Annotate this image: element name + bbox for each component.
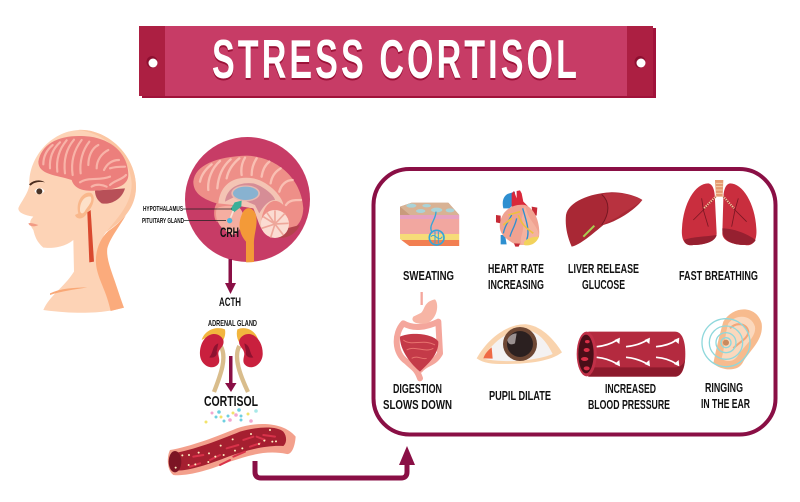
label: fast breathing: FAST BREATHING [679,268,758,283]
label: CRH: CRH [220,224,239,240]
label: adrenal gland: ADRENAL GLAND [208,318,257,328]
label: digestion slows down: DIGESTION [393,381,442,396]
label: ringing in the ear: IN THE EAR [701,396,750,411]
icon: eye [477,324,562,364]
head with brain illustration [18,130,136,313]
icon: digestive system [397,292,440,378]
icon: blood vessel pressure [577,332,685,377]
icon: ringing ear [702,309,762,369]
label: cortisol: CORTISOL [204,393,258,410]
label: increased blood pressure: BLOOD PRESSURE [588,397,670,412]
icon: lungs [682,180,756,245]
label: increased blood pressure [588,381,670,412]
label: liver release glucose [568,261,639,292]
label: heart rate increasing: INCREASING [488,277,544,292]
arrow: brain to ACTH [225,259,236,294]
label: ACTH: ACTH [219,295,241,309]
icon: heart [496,190,539,247]
icon: sweating skin [400,202,460,246]
arrow: vessel to symptoms panel [255,457,407,478]
label: pupil dilate: PUPIL DILATE [489,388,551,403]
label: ringing in the ear [701,380,750,411]
panel: symptoms [374,169,776,434]
label: digestion slows down: SLOWS DOWN [383,397,452,412]
label: liver release glucose: GLUCOSE [582,277,625,292]
kidneys [200,328,263,392]
label: ringing in the ear: RINGING [705,380,743,395]
label: digestion slows down [383,381,452,412]
label: hypothalamus: HYPOTHALAMUS [143,206,183,213]
cortisol molecules [204,408,258,424]
brain cross-section circle [142,137,310,263]
icon: liver [566,192,642,247]
label: liver release glucose: LIVER RELEASE [568,261,639,276]
label leader lines [183,209,232,220]
title banner [139,26,656,98]
label: pituitary gland: PITUITARY GLAND [142,218,184,225]
label: sweating: SWEATING [403,268,454,283]
blood vessel [168,424,296,475]
arrow: adrenal to cortisol [225,356,236,392]
label: heart rate increasing: HEART RATE [488,261,544,276]
label: heart rate increasing [488,261,544,292]
title text: STRESS CORTISOL [212,28,580,90]
arrow head [399,446,415,465]
label: increased blood pressure: INCREASED [605,381,656,396]
